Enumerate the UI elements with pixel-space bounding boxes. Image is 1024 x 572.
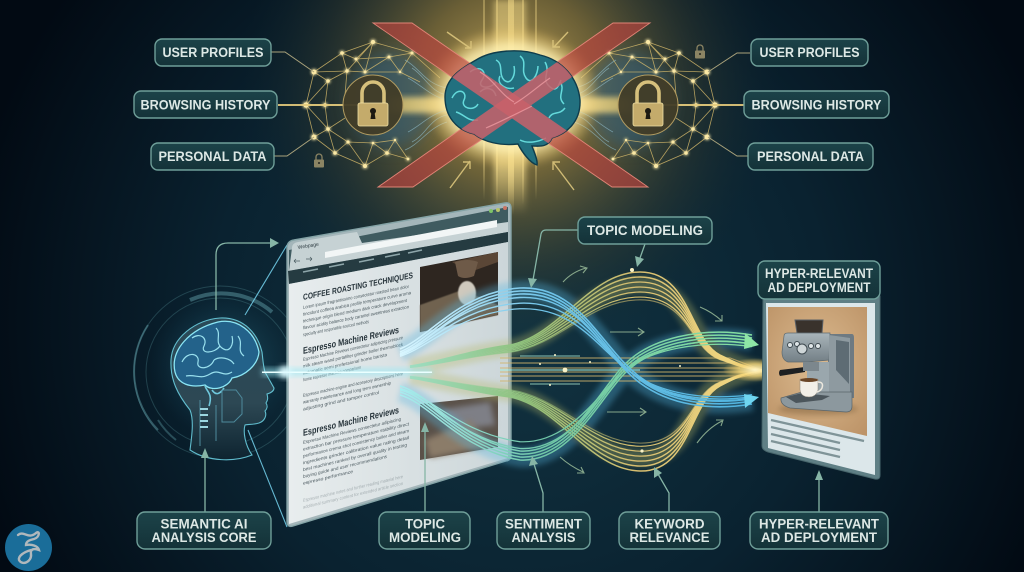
label: semantic AI core: ANALYSIS CORE [152, 530, 256, 545]
network: left data lock [278, 40, 460, 168]
stream blue ribbon [400, 288, 752, 407]
label: user profiles right: USER PROFILES [760, 45, 860, 60]
icon: espresso machine [778, 320, 858, 415]
label: keyword relevance: RELEVANCE [630, 530, 710, 545]
label: browsing history right: BROWSING HISTORY [752, 98, 882, 112]
red X over brain [452, 62, 572, 144]
vertical light beam [483, 0, 537, 215]
stream lower gold ribbon [410, 371, 762, 471]
body text block 3: ingredients grinder calibration value rating detail [303, 435, 409, 465]
stream glow [400, 285, 762, 458]
body text block 3: espresso performance [303, 469, 353, 486]
projection lines from head to browser [245, 245, 287, 527]
panel: semantic data streams [262, 217, 787, 549]
panel: browser webpage [287, 203, 511, 526]
label: topic modeling top: TOPIC MODELING [587, 223, 703, 238]
label: keyword relevance [619, 512, 720, 549]
address bar [325, 220, 497, 258]
label: topic modeling bottom: TOPIC [405, 516, 445, 532]
body text block 2: Espresso Machine Reviews consectetur adipiscing pressure [303, 335, 403, 362]
center gold band [500, 356, 762, 384]
ad photo [768, 307, 867, 436]
body text block 1: Lorem ipsum fragrantissimo consectetur roasted bean dolor [303, 284, 409, 310]
arrow: sentiment to stream [529, 456, 543, 512]
body text block 3 [303, 414, 410, 510]
label connectors [271, 52, 750, 156]
label: browsing history right [744, 91, 889, 118]
label: sentiment analysis: SENTIMENT [505, 516, 583, 532]
label: hyper-relevant bottom: AD DEPLOYMENT [761, 530, 878, 545]
webpage content [289, 242, 508, 524]
label: personal data right: PERSONAL DATA [757, 149, 864, 164]
body text block 1: flavour acidity balance body caramel sweetness extraction [303, 304, 409, 330]
body text block 2: warranty maintenance and long term ownership [303, 380, 391, 405]
stream arrowhead blue [744, 394, 759, 408]
scanner rings [134, 286, 306, 458]
label: card header [758, 261, 880, 299]
label: hyper-relevant bottom [750, 512, 888, 549]
label: card header: HYPER-RELEVANT [765, 266, 874, 281]
small flow arrows [560, 266, 723, 473]
stream green ribbon [400, 332, 752, 460]
icon: logo badge [5, 524, 52, 571]
label: user profiles left: USER PROFILES [162, 45, 264, 60]
label: keyword relevance: KEYWORD [634, 516, 705, 532]
arrow: core to webpage [216, 238, 279, 310]
label: sentiment analysis: ANALYSIS [512, 530, 576, 545]
stream sparks [539, 268, 681, 453]
window buttons [489, 206, 507, 213]
panel: ad card [750, 261, 888, 549]
icon: central brain [445, 51, 580, 165]
label: browsing history left [134, 91, 277, 118]
photo: coffee beans [420, 252, 498, 332]
red cross-out X behind brain [373, 23, 650, 187]
icon: right padlock [618, 75, 678, 135]
arrow: label to head [201, 448, 209, 512]
label: personal data left [151, 143, 274, 170]
label: personal data left: PERSONAL DATA [158, 149, 267, 164]
nav arrows [294, 257, 312, 263]
label: browsing history left: BROWSING HISTORY [140, 98, 270, 112]
card frame [762, 296, 880, 479]
body text block 2: Espresso machine engine and accessory descriptions here [303, 371, 403, 398]
panel: AI analysis head [134, 238, 306, 549]
browser tab [289, 222, 508, 271]
body text block 1: tincidunt coffeea arabica profile temperature curve aroma [303, 290, 411, 317]
photo: hands [420, 396, 498, 460]
body text block 1: specialty and responsible sourced methods [303, 319, 370, 337]
body text block 2: home espresso machine comparison [303, 365, 361, 382]
browser frame [287, 203, 511, 526]
heading: espresso reviews 1: Espresso Machine Reviews [303, 325, 399, 357]
label: hyper-relevant bottom: HYPER-RELEVANT [759, 516, 880, 532]
label: user profiles right [751, 39, 868, 66]
arrow: deployment to card [815, 470, 823, 512]
heading: coffee roasting: COFFEE ROASTING TECHNIQUES [303, 270, 413, 302]
icon: small lock right [695, 45, 705, 58]
nav strip [288, 232, 508, 284]
panel: blocked personal data [134, 0, 889, 215]
label: topic modeling bottom [379, 512, 470, 549]
browser tab title: Webpage [297, 242, 320, 251]
label: semantic AI core [137, 512, 271, 549]
body text block 2: milk steam wand portafilter grinder boiler thermoblock [303, 342, 404, 369]
stream arrowhead green [744, 333, 759, 349]
icon: left padlock [343, 75, 403, 135]
label: card header: AD DEPLOYMENT [768, 280, 871, 295]
body text block 1 [303, 283, 411, 337]
arrows pointing to brain [447, 32, 574, 190]
browser top bar [289, 207, 508, 272]
arrow: topic modeling to streams [528, 230, 578, 288]
label: topic modeling top [578, 217, 712, 244]
head glow [150, 293, 294, 437]
body text block 2: adjusting grind and tamper control [303, 390, 379, 412]
icon: small lock left [314, 154, 324, 168]
beam from head [262, 366, 432, 378]
arrow: topic modeling to page [421, 422, 429, 512]
body text block 3: best machines ranked by overall quality in testing [303, 442, 407, 472]
arrow: keyword to stream [654, 467, 669, 512]
label: user profiles left [155, 39, 271, 66]
body text block 3: performance crema shot consistency boiler and steam [303, 428, 409, 459]
golden radiance behind brain [190, 0, 830, 360]
body text block 3: Espresso Machine Reviews consectetur adipiscing [303, 416, 401, 445]
body text block 3: Espresso machine notes and further reading material here [303, 474, 403, 503]
label: semantic AI core: SEMANTIC AI [160, 516, 248, 532]
body text block 3: buying guide and user recommendations [303, 454, 388, 479]
stream upper gold ribbon [410, 272, 762, 370]
brain glow [422, 26, 602, 170]
nav items [303, 250, 422, 272]
icon: human head profile with brain [171, 318, 274, 460]
ad text lines [771, 420, 864, 457]
arrow: topic modeling to upper ribbon [635, 244, 645, 267]
card paper [766, 303, 875, 475]
label: topic modeling bottom: MODELING [389, 530, 461, 545]
body text block 3: extraction bar pressure temperature stability direct [303, 421, 410, 452]
body text block 1: technique origin blend medium dark crack development [303, 298, 408, 324]
heading: espresso reviews 2: Espresso Machine Reviews [303, 405, 399, 439]
body text block 2: automatic semi professional home barista [303, 352, 387, 376]
network: right data lock [561, 40, 744, 168]
label: personal data right [748, 143, 873, 170]
body text block 3: additional summary content for extended article section [303, 481, 403, 510]
body text block 2 [303, 335, 404, 412]
convergence glow [723, 358, 787, 382]
label: sentiment analysis [497, 512, 590, 549]
